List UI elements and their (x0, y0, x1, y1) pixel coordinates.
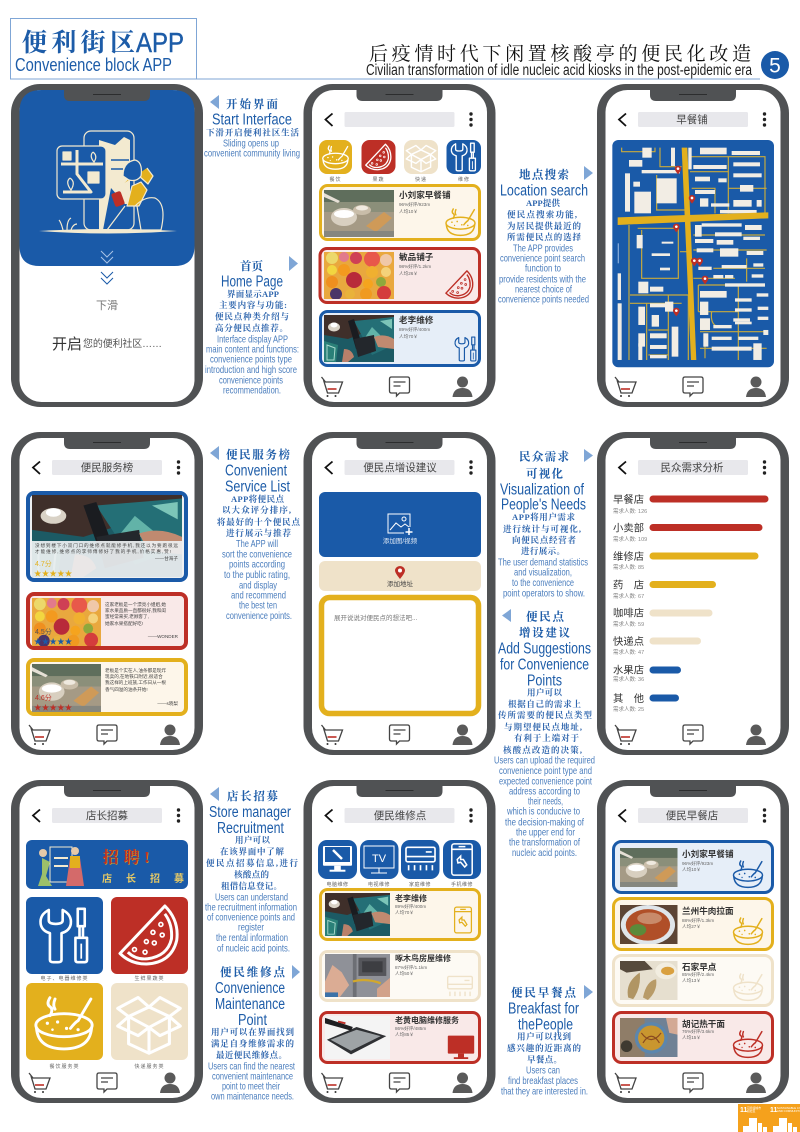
text: recruitment: of convenience points and (207, 912, 295, 924)
text: breakfast: thePeople (518, 1016, 573, 1034)
text: maintenance point: Users can find the nearest (208, 1060, 295, 1072)
text: add suggestions: Points (527, 672, 562, 690)
text: breakfast: find breakfast places (508, 1075, 578, 1087)
swipe label: 下滑 (96, 299, 118, 312)
logo box: title (10, 18, 196, 79)
text: location search: convenience point search (500, 252, 585, 264)
text: people's needs: 向便民点经营者 (512, 535, 576, 545)
header (10, 18, 789, 79)
swipe chevrons (101, 251, 113, 284)
address panel: 添加地址 (387, 579, 414, 588)
text: breakfast: 感兴趣的近距离的 (507, 1043, 581, 1053)
text: people's needs: 民众需求 (519, 450, 570, 464)
screen title: 便民早餐店 (666, 809, 718, 822)
badge: SDG 11 (738, 1104, 800, 1132)
open community label: 您的便利社区…… (83, 337, 162, 350)
card: 兰州牛肉拉面: 88%好评/1.3km (682, 917, 714, 924)
text: home page (205, 256, 299, 396)
bar chart: 需求人数: 47 (613, 648, 644, 656)
review card: repair: 才能维修,维修点的李师傅修好了我的手机,价格实惠,赞! (35, 548, 171, 555)
phone: service list (11, 432, 203, 755)
text: people's needs: 进行展示。 (521, 546, 565, 556)
card: 啄木鸟房屋维修: 87%好评/1.1km (395, 964, 427, 971)
text: recruitment: of nucleic acid points. (217, 942, 290, 954)
card: 敏品铺子: 人均26￥ (399, 270, 418, 277)
review card: breakfast: ★★★★★ (34, 703, 73, 712)
text: location search: 地点搜索 (519, 168, 570, 182)
card: 石家早点: 人均13￥ (682, 977, 701, 984)
text: recruitment: the recruitment information (205, 902, 297, 914)
phone: recruitment (11, 780, 203, 1103)
address panel (319, 561, 481, 591)
upload panel (319, 492, 481, 557)
recruitment banner: 招聘! (103, 848, 150, 867)
badge: SDG 11: 11 (770, 1107, 778, 1114)
text: recruitment: 租借信息登记。 (221, 881, 282, 891)
comment box: 展开说说对便民点的想法吧... (334, 613, 418, 622)
phone: demand analysis (597, 432, 789, 755)
screen title: 便民点增设建议 (363, 461, 437, 474)
text: add suggestions: 便民点 (526, 610, 566, 624)
tile: repair (26, 897, 103, 982)
text: people's needs: The user demand statistics (498, 556, 588, 568)
open community label: 开启 (52, 336, 82, 353)
screen title: 便民维修点 (374, 809, 426, 822)
review card: fruit: ——WONDER (148, 634, 179, 639)
text: location search: 为居民提供最近的 (507, 221, 581, 231)
logo box: title: 便利街区 (22, 29, 135, 57)
text: recruitment: Users can understand (215, 892, 288, 904)
bar chart: 小卖部 (613, 522, 644, 534)
text: home page: 便民点种类介绍与 (215, 312, 289, 322)
card: 胡记热干面: 人均15￥ (682, 1034, 701, 1041)
text: service list: the best ten (239, 600, 277, 612)
text: home page: convenience points type (210, 354, 292, 366)
text: home page: 首页 (240, 259, 264, 273)
card: 啄木鸟房屋维修: 啄木鸟房屋维修 (395, 953, 451, 963)
bar chart: 需求人数: 67 (613, 592, 644, 600)
text: add suggestions: for Convenience (500, 656, 589, 674)
tile: food (26, 983, 103, 1070)
card: 石家早点 (614, 956, 772, 1006)
text: people's needs: APP将用户需求 (512, 512, 575, 522)
review card: breakfast: 4.6分 (35, 693, 52, 702)
text: people's needs: point operators to show. (503, 588, 585, 600)
text: add suggestions: 与期望便民点地址, (504, 722, 582, 732)
review card: repair: ——甘海子 (155, 555, 178, 562)
card: 敏品铺子 (320, 248, 480, 302)
review card: breakfast: ——s晓梨 (157, 700, 178, 707)
screen title: 民众需求分析 (660, 461, 724, 474)
text: home page: 高分便民点推荐。 (215, 323, 288, 333)
text: breakfast: 便民早餐点 (511, 986, 578, 1000)
text: maintenance point: convenient maintenance (212, 1070, 293, 1082)
bar chart: 需求人数: 59 (613, 620, 644, 628)
phone: map search (597, 84, 789, 407)
text: location search: nearest choice of (515, 284, 572, 296)
review card: repair: 没想到楼下小双门口的维修点就能修手机,我还以为要跑很远 (35, 542, 178, 549)
card: 兰州牛肉拉面: 人均27￥ (682, 923, 701, 930)
bar chart: 早餐店 (613, 493, 644, 506)
bar chart: 需求人数: 109 (613, 535, 647, 543)
text: maintenance point: 用户可以在界面找到 (211, 1027, 294, 1037)
card: 小刘家早餐铺: 人均10￥ (682, 866, 701, 873)
bar chart (613, 493, 768, 713)
card: 小刘家早餐铺 (320, 186, 480, 240)
repair category icons: 手机维修 (451, 881, 473, 888)
category icons: 餐饮 (329, 176, 342, 183)
text: service list: and display (239, 580, 278, 592)
text: add suggestions: the transformation of (509, 836, 580, 848)
text: breakfast: that they are interested in. (501, 1086, 588, 1098)
text: location search: function to (525, 262, 561, 274)
text: location search: convenience points needed (498, 294, 589, 306)
text: home page: Home Page (221, 274, 283, 290)
repair category icons: 电脑维修 (326, 881, 349, 888)
bar chart: 需求人数: 85 (613, 563, 644, 571)
card: 胡记热干面: 76%好评/3.6km (682, 1028, 714, 1035)
review card: fruit: 这家老板是一个漂亮小姐姐,她 (105, 601, 166, 608)
card: 老李维修: 人均70￥ (395, 909, 414, 916)
text: recruitment: 核酸点的 (234, 870, 269, 880)
tile: delivery: 快递服务类 (134, 1063, 165, 1070)
review card: breakfast: 我这样的上班族,工作日从一根 (105, 679, 166, 686)
text: recruitment: 店长招募 (227, 789, 278, 803)
text: maintenance point: 便民维修点 (220, 965, 286, 979)
card: 小刘家早餐铺 (614, 842, 772, 892)
text: service list: The APP will (236, 538, 278, 550)
text: recruitment: Store manager (209, 804, 291, 821)
text: home page: Interface display APP (217, 334, 288, 346)
recruitment banner: 招聘! (102, 848, 150, 866)
card: 啄木鸟房屋维修: 人均50￥ (395, 970, 414, 977)
text: service list: 以大众评分排序, (222, 505, 291, 515)
card: 敏品铺子: 98%好评/1.2km (399, 263, 431, 270)
text: location search: Location search (500, 182, 588, 200)
card: 石家早点: 85%好评/2.4km (682, 971, 714, 978)
card: 老李维修: 人均70￥ (399, 333, 418, 340)
tile: delivery (111, 983, 188, 1070)
text: maintenance point: Convenience (215, 980, 285, 997)
text: add suggestions: 根据自己的需求上 (508, 699, 581, 709)
text: service list: 便民服务榜 (226, 448, 290, 462)
text: add suggestions: 用户可以 (527, 688, 563, 698)
text: recruitment (205, 787, 298, 954)
text: home page: 主要内容与功能: (219, 300, 287, 310)
text: recruitment: 用户可以 (235, 835, 271, 845)
text: home page: 界面显示APP (227, 289, 279, 299)
main heading (366, 43, 752, 79)
text: maintenance point: 最近便民维修点。 (216, 1050, 287, 1060)
category icons: 快递 (415, 176, 427, 183)
text: add suggestions: the decision-making of (505, 816, 584, 828)
text: breakfast (501, 985, 593, 1098)
text: add suggestions: expected convenience point (499, 776, 592, 788)
card: 老黄电脑维修服务: 老黄电脑维修服务 (395, 1015, 459, 1025)
text: start interface: Sliding opens up (223, 138, 279, 150)
text: service list: Service List (225, 478, 291, 496)
screen title: 早餐铺 (676, 113, 708, 126)
bar chart: 快递点 (613, 635, 644, 648)
text: maintenance point: point to meet their (222, 1080, 280, 1092)
review card: breakfast (28, 660, 186, 714)
text: recruitment: Recruitment (217, 820, 285, 837)
phone: maintenance (304, 780, 496, 1103)
card: 石家早点: 石家早点 (682, 961, 717, 972)
text: add suggestions (494, 609, 595, 859)
recruitment banner: 店长招募 (102, 872, 184, 885)
page number badge (761, 51, 789, 79)
location pins (673, 166, 708, 316)
review card: fruit (28, 594, 186, 648)
illustration: woman with phone and map (57, 131, 163, 230)
review card: fruit: ★★★★★ (34, 637, 73, 646)
text: home page: introduction and high score (205, 364, 297, 376)
card: 老黄电脑维修服务: 人均85￥ (395, 1031, 414, 1038)
review card: breakfast: 现卖的,在地铁口附近,很适合 (105, 673, 163, 680)
card: 老李维修: 老李维修 (399, 314, 434, 325)
text: service list: to the public rating, (224, 569, 290, 581)
text: add suggestions: 传所需要的便民点类型 (498, 710, 592, 720)
text: home page: convenience points (219, 374, 283, 386)
card: 小刘家早餐铺: 96%好评/923m (682, 860, 713, 867)
phone: add suggestions (304, 432, 496, 755)
text: maintenance point: Point (238, 1012, 268, 1029)
text: recruitment: register (238, 922, 264, 934)
text: service list: sort the convenience (222, 548, 292, 560)
bar chart: 需求人数: 25 (613, 705, 644, 713)
card: 胡记热干面 (614, 1012, 772, 1062)
text: people's needs: to the convenience (512, 577, 574, 589)
text: recruitment: 便民点招募信息,进行 (206, 858, 298, 868)
repair category icons (318, 840, 481, 888)
phone: start interface (11, 84, 203, 407)
text: start interface: convenient community living (204, 148, 300, 160)
blue splash panel (20, 90, 194, 266)
text: service list: 进行展示与推荐 (226, 528, 291, 538)
text: add suggestions: 核酸点改造的决策, (503, 745, 582, 755)
tile: repair: 电子、电器维修类 (40, 975, 89, 982)
badge: SDG 11: 和社区 (747, 1109, 756, 1113)
text: maintenance point: own maintenance needs. (211, 1090, 294, 1102)
phone: home page (304, 84, 496, 407)
text: people's needs: 进行统计与可视化, (503, 524, 581, 534)
card: 老李维修: 老李维修 (395, 893, 427, 903)
text: location search: APP提供 (526, 198, 560, 208)
text: add suggestions: 增设建议 (519, 626, 570, 640)
text: start interface: Start Interface (212, 112, 292, 128)
text: add suggestions: address according to (509, 786, 580, 798)
text: service list: and recommend (231, 590, 286, 602)
card: 小刘家早餐铺: 人均10￥ (399, 208, 418, 215)
review card: breakfast: 香气四溢的油条开始! (105, 686, 148, 693)
text: add suggestions: convenience point type and (499, 765, 592, 777)
text: start interface (204, 95, 300, 160)
upload panel: 添加图/视频 (383, 536, 418, 545)
bar chart: 需求人数: 36 (613, 675, 644, 683)
tile: fruit (111, 897, 188, 982)
text: breakfast: 早餐点。 (527, 1054, 562, 1064)
open community label (52, 336, 162, 353)
text: location search: The APP provides (513, 242, 573, 254)
review card: repair: 4.7分 (35, 559, 52, 568)
text: add suggestions: nucleic acid points. (512, 847, 577, 859)
card: 胡记热干面: 胡记热干面 (682, 1018, 725, 1029)
text: add suggestions: the upper end for (516, 826, 575, 838)
page number badge: 5 (769, 54, 781, 78)
logo box: title: APP (136, 27, 184, 58)
text: service list: APP将便民点 (231, 494, 284, 504)
tile: food: 餐饮服务类 (49, 1063, 80, 1070)
text: service list: Convenient (225, 462, 288, 480)
bar chart: 药 店 (613, 578, 644, 592)
logo box: title: Convenience block APP (15, 55, 172, 75)
main heading: 后疫情时代下闲置核酸亭的便民化改造 (369, 43, 751, 65)
category icons (319, 140, 481, 183)
card: 兰州牛肉拉面 (614, 898, 772, 950)
bar chart: 需求人数: 126 (613, 507, 647, 515)
screen title: 店长招募 (86, 809, 128, 822)
text: people's needs: People's Needs (501, 496, 586, 514)
comment box (322, 598, 478, 714)
review card: fruit: 家水果品质一直都很好,我和闺 (105, 607, 166, 614)
card: 老黄电脑维修服务: 86%好评/485m (395, 1025, 426, 1032)
card: 老李维修 (320, 890, 480, 940)
text: people's needs: and visualization, (514, 566, 572, 578)
recruitment banner (26, 840, 188, 889)
review card: repair: ★★★★★ (34, 569, 73, 578)
repair category icons: 家庭维修 (409, 881, 431, 888)
text: people's needs: 可视化 (526, 466, 564, 480)
card: 小刘家早餐铺: 小刘家早餐铺 (399, 189, 451, 200)
text: recruitment: 在该界面中了解 (220, 846, 284, 856)
text: service list: convenience points. (226, 610, 292, 622)
review card: repair (28, 493, 186, 580)
category icons: 维修 (458, 176, 470, 183)
text: people's needs: Visualization of (500, 482, 585, 498)
card: 老黄电脑维修服务 (320, 1012, 480, 1062)
bar chart: 其 他 (613, 692, 644, 705)
text: add suggestions: Users can upload the required (494, 754, 595, 766)
text: add suggestions: their needs, (528, 796, 563, 808)
card: 敏品铺子: 敏品铺子 (399, 251, 434, 262)
text: breakfast: Breakfast for (508, 1000, 579, 1018)
bar chart: 水果店 (613, 664, 644, 676)
text: add suggestions: 有利于上端对于 (514, 733, 579, 743)
card: 老李维修: 89%好评/400m (395, 903, 426, 910)
card: 老李维修: 89%好评/400m (399, 326, 430, 333)
repair category icons: 电视维修 (368, 881, 390, 888)
card: 老李维修 (320, 312, 480, 366)
text: breakfast: Users can (526, 1064, 560, 1076)
map (612, 140, 774, 367)
text: location search: provide residents with the (499, 274, 586, 286)
bar chart: 咖啡店 (613, 606, 644, 620)
tile: fruit: 生鲜果蔬类 (134, 975, 165, 982)
card: 啄木鸟房屋维修 (320, 952, 480, 1000)
text: service list: points according (229, 558, 285, 570)
badge: SDG 11: 可持续城市 (747, 1106, 761, 1110)
badge: SDG 11: 11 (740, 1107, 748, 1114)
text: service list (210, 446, 300, 622)
card: 小刘家早餐铺: 小刘家早餐铺 (682, 848, 734, 859)
text: maintenance point (208, 965, 300, 1102)
text: location search: 便民点搜索功能, (507, 210, 577, 220)
text: breakfast: 用户可以找到 (517, 1032, 571, 1042)
card: 小刘家早餐铺: 96%好评/923m (399, 201, 430, 208)
text: add suggestions: which is conducive to (506, 806, 580, 818)
phone: breakfast (597, 780, 789, 1103)
bar chart: 维修店 (613, 550, 644, 563)
review card: fruit: 蜜经常来买,老顾客了, (105, 613, 149, 620)
text: add suggestions: Add Suggestions (498, 640, 591, 658)
category icons: 果蔬 (372, 176, 385, 183)
text: people's needs (498, 449, 593, 600)
text: start interface: 下滑开启便利社区生活 (206, 128, 299, 138)
repair category icons: TV (372, 853, 387, 865)
review card: breakfast: 老板是个实在人,油条都是现炸 (105, 667, 166, 674)
text: maintenance point: Maintenance (215, 996, 285, 1013)
text: location search (498, 166, 593, 306)
text: maintenance point: 满足自身维修需求的 (211, 1038, 294, 1048)
text: home page: main content and functions: (206, 344, 299, 356)
text: location search: 所需便民点的选择 (507, 232, 581, 242)
text: home page: recommendation. (223, 384, 281, 396)
review card: fruit: 她家水果搭配好吃! (105, 620, 143, 627)
text: start interface: 开始界面 (226, 97, 278, 111)
card: 兰州牛肉拉面: 兰州牛肉拉面 (682, 905, 734, 916)
text: service list: 将最好的十个便民点 (217, 517, 300, 527)
screen title: 便民服务榜 (81, 461, 133, 474)
review card: fruit: 4.5分 (35, 627, 52, 636)
text: recruitment: the rental information (216, 932, 288, 944)
